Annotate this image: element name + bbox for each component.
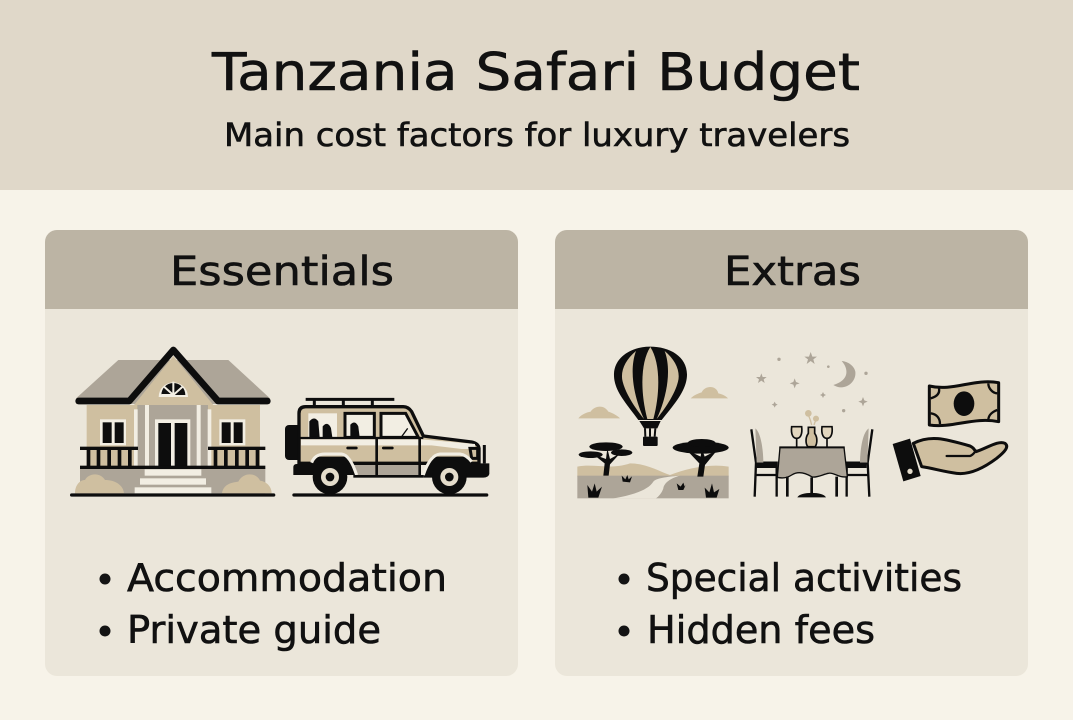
header band (0, 0, 1073, 190)
panel: essentials (45, 230, 518, 676)
panel: extras (555, 230, 1028, 676)
bullet list: extras: Special activities (646, 556, 962, 600)
bullet list: extras: Hidden fees (647, 608, 875, 652)
subtitle: Main cost factors for luxury travelers (224, 116, 850, 154)
bullet list: essentials: Accommodation (127, 556, 447, 600)
bullet list: essentials (100, 556, 447, 652)
heading: essentials: Essentials (170, 249, 394, 295)
heading: extras: Extras (724, 249, 861, 295)
icon: balloon over savanna (577, 347, 729, 498)
icon: starlit dinner (751, 352, 1007, 497)
icon: safari vehicle (285, 399, 489, 497)
icon: safari lodge (70, 350, 275, 497)
bullet list: extras (618, 556, 962, 652)
title: Tanzania Safari Budget (211, 43, 860, 103)
bullet list: essentials: Private guide (127, 608, 381, 652)
